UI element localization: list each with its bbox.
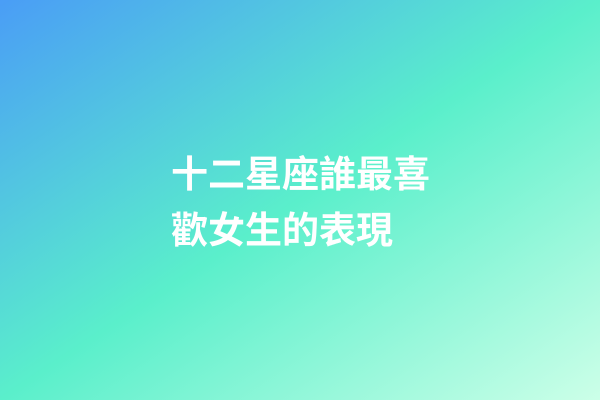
title: 歡女生的表現 <box>171 210 393 251</box>
title <box>171 154 430 251</box>
title: 十二星座誰最喜 <box>171 154 430 195</box>
